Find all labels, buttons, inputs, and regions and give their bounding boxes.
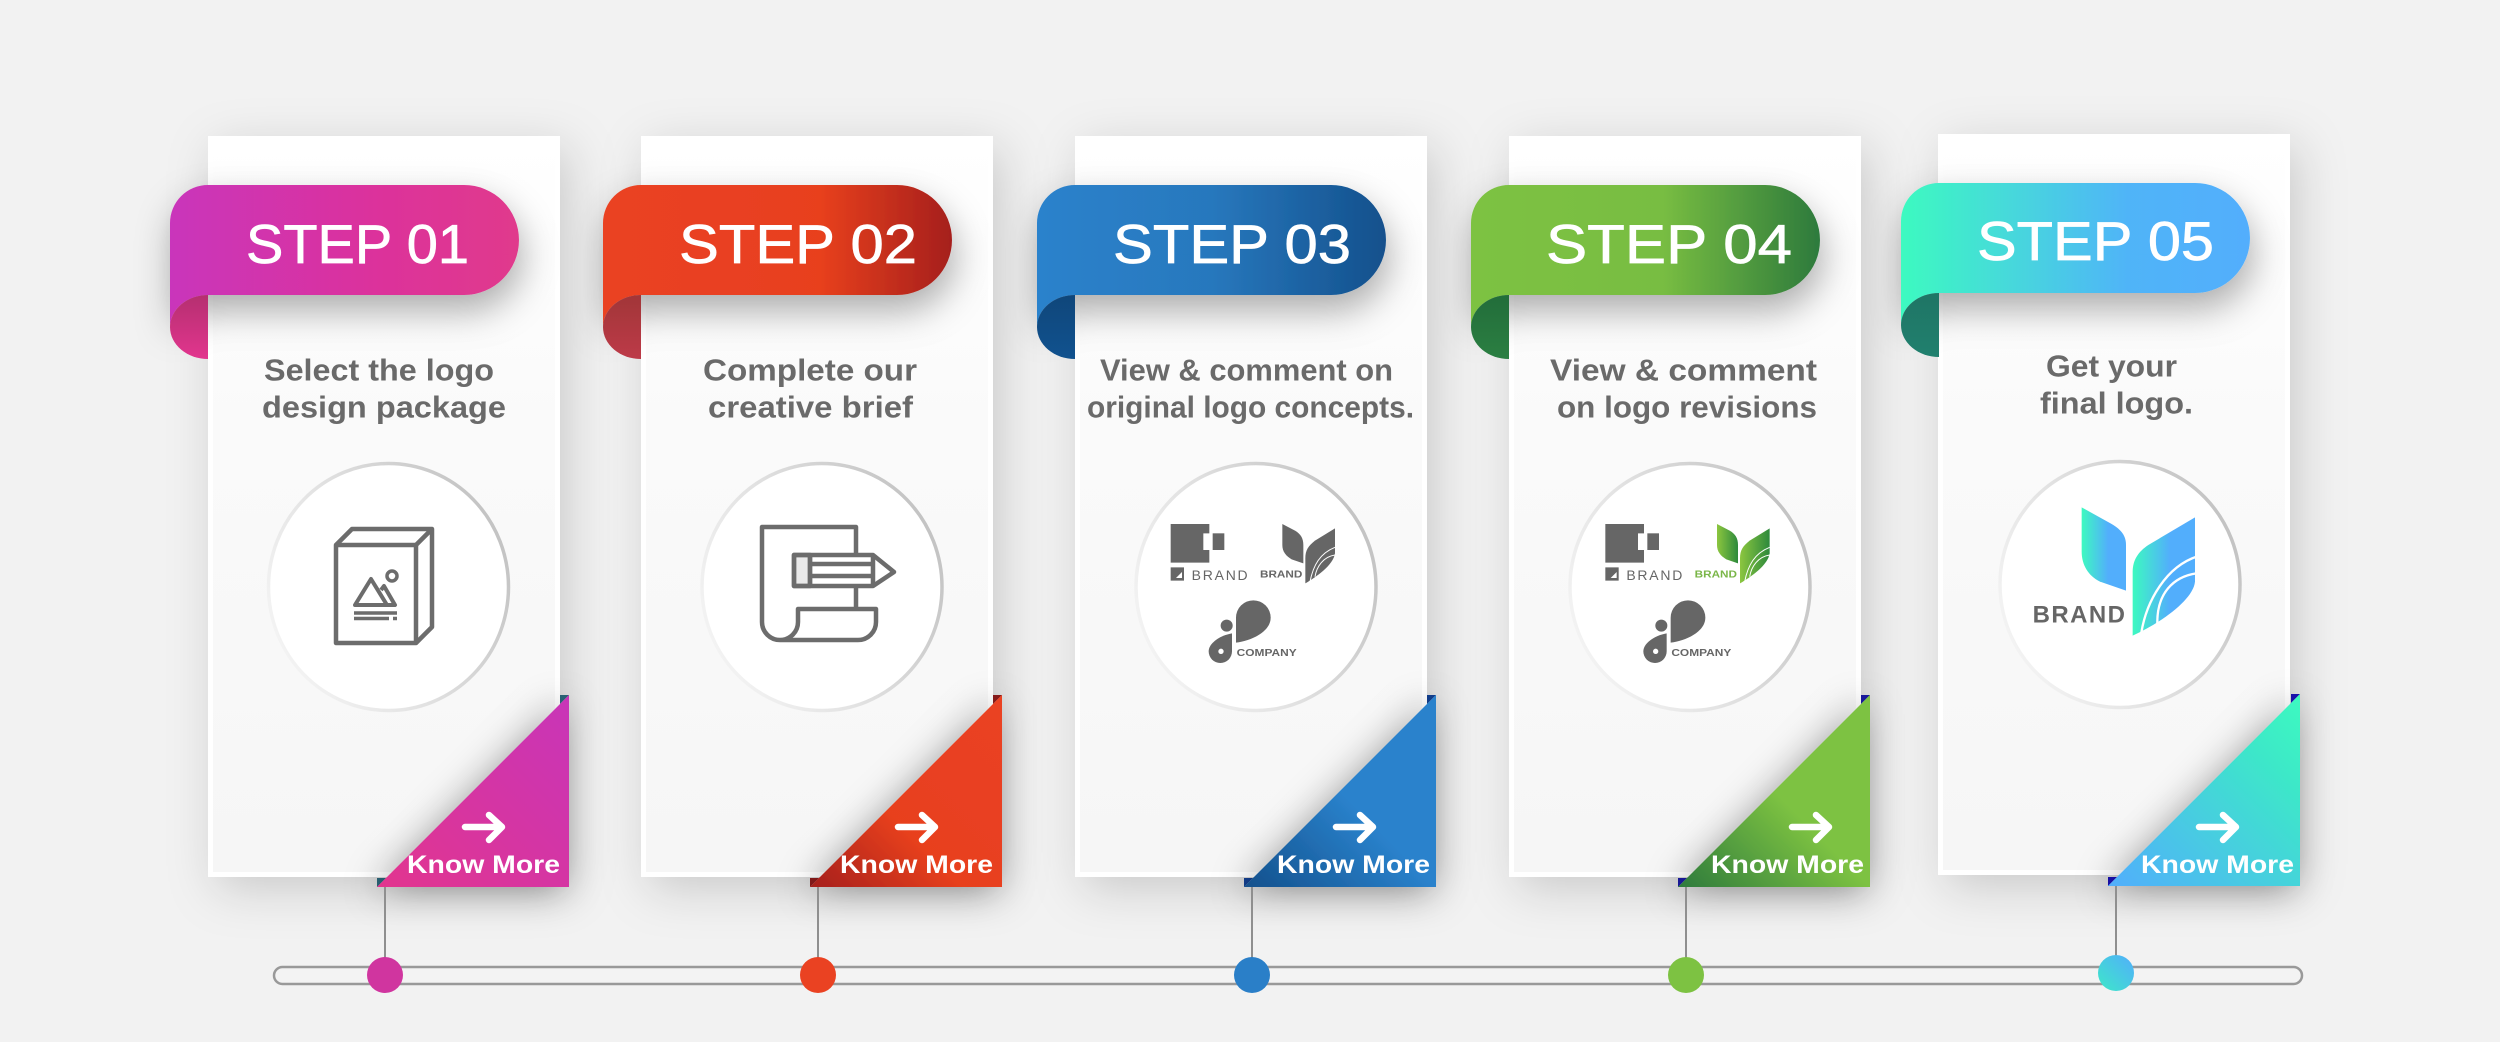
description 3: View & comment on: [1100, 352, 1393, 388]
icon: grey logo concepts: COMPANY: [1237, 648, 1297, 659]
corner button 3: [1244, 695, 1436, 887]
description 5: final logo.: [2040, 386, 2193, 420]
panel: step 3: [1037, 136, 1436, 993]
icon: grey logo concepts: BRAND: [1260, 569, 1303, 580]
ribbon: step 04: STEP 04: [1546, 213, 1792, 275]
circle 3: [1136, 464, 1376, 710]
card 1: [208, 136, 560, 877]
ribbon: step 03: STEP 03: [1113, 213, 1351, 275]
card 2: [641, 136, 993, 877]
timeline marker 5: [2098, 886, 2134, 991]
description 1: [262, 352, 506, 424]
icon: logo concepts with green selection: BRAND: [1626, 567, 1682, 583]
description 4: View & comment: [1550, 352, 1817, 388]
panel: step 1: [170, 136, 569, 993]
timeline marker 4: [1668, 887, 1704, 993]
icon: logo concepts with green selection: COMPANY: [1671, 648, 1732, 659]
description 3: [1087, 352, 1414, 424]
icon: logo concepts with green selection: [1605, 524, 1770, 663]
circle 1: [268, 464, 508, 710]
circle 5: [2000, 462, 2240, 708]
icon: logo concepts with green selection: BRAND: [1695, 569, 1738, 580]
card 3: [1075, 136, 1427, 877]
description 5: [2040, 348, 2193, 420]
description 5: Get your: [2046, 348, 2177, 384]
corner button 4: Know More: [1711, 851, 1864, 879]
description 2: Complete our: [703, 352, 917, 388]
ribbon: step 01: [170, 185, 519, 359]
description 1: design package: [262, 390, 506, 424]
card 4: [1509, 136, 1861, 877]
ribbon: step 02: STEP 02: [679, 213, 917, 275]
description 4: [1550, 352, 1817, 424]
ribbon: step 04: [1471, 185, 1820, 359]
corner button 1: [377, 695, 569, 887]
corner button 5: Know More: [2141, 851, 2294, 879]
panel: step 5: [1901, 134, 2300, 991]
timeline marker 1: [367, 887, 403, 993]
timeline marker 2: [800, 887, 836, 993]
timeline track: [274, 967, 2302, 984]
corner button 1: Know More: [407, 851, 560, 879]
ribbon: step 05: STEP 05: [1977, 210, 2214, 272]
icon: grey logo concepts: BRAND: [1192, 567, 1248, 583]
ribbon: step 02: [603, 185, 952, 359]
ribbon: step 05: [1901, 183, 2250, 357]
description 2: [703, 352, 917, 424]
icon: final colour logo: [2033, 507, 2197, 636]
card 5: [1938, 134, 2290, 875]
corner button 2: Know More: [840, 851, 993, 879]
panel: step 2: [603, 136, 1002, 993]
corner button 3: Know More: [1277, 851, 1430, 879]
corner button 2: [810, 695, 1002, 887]
corner button 5: [2108, 694, 2300, 886]
description 4: on logo revisions: [1557, 390, 1817, 424]
description 1: Select the logo: [264, 352, 494, 388]
circle 4: [1570, 464, 1810, 710]
ribbon: step 01: STEP 01: [246, 213, 469, 275]
icon: package box: [336, 529, 432, 643]
timeline marker 3: [1234, 887, 1270, 993]
icon: grey logo concepts: [1171, 524, 1335, 663]
panel: step 4: [1471, 136, 1870, 993]
description 2: creative brief: [708, 390, 914, 424]
ribbon: step 03: [1037, 185, 1386, 359]
description 3: original logo concepts.: [1087, 390, 1414, 424]
corner button 4: [1678, 695, 1870, 887]
circle 2: [702, 464, 942, 710]
icon: final colour logo: BRAND: [2033, 601, 2125, 628]
icon: brief with pencil: [762, 527, 894, 640]
